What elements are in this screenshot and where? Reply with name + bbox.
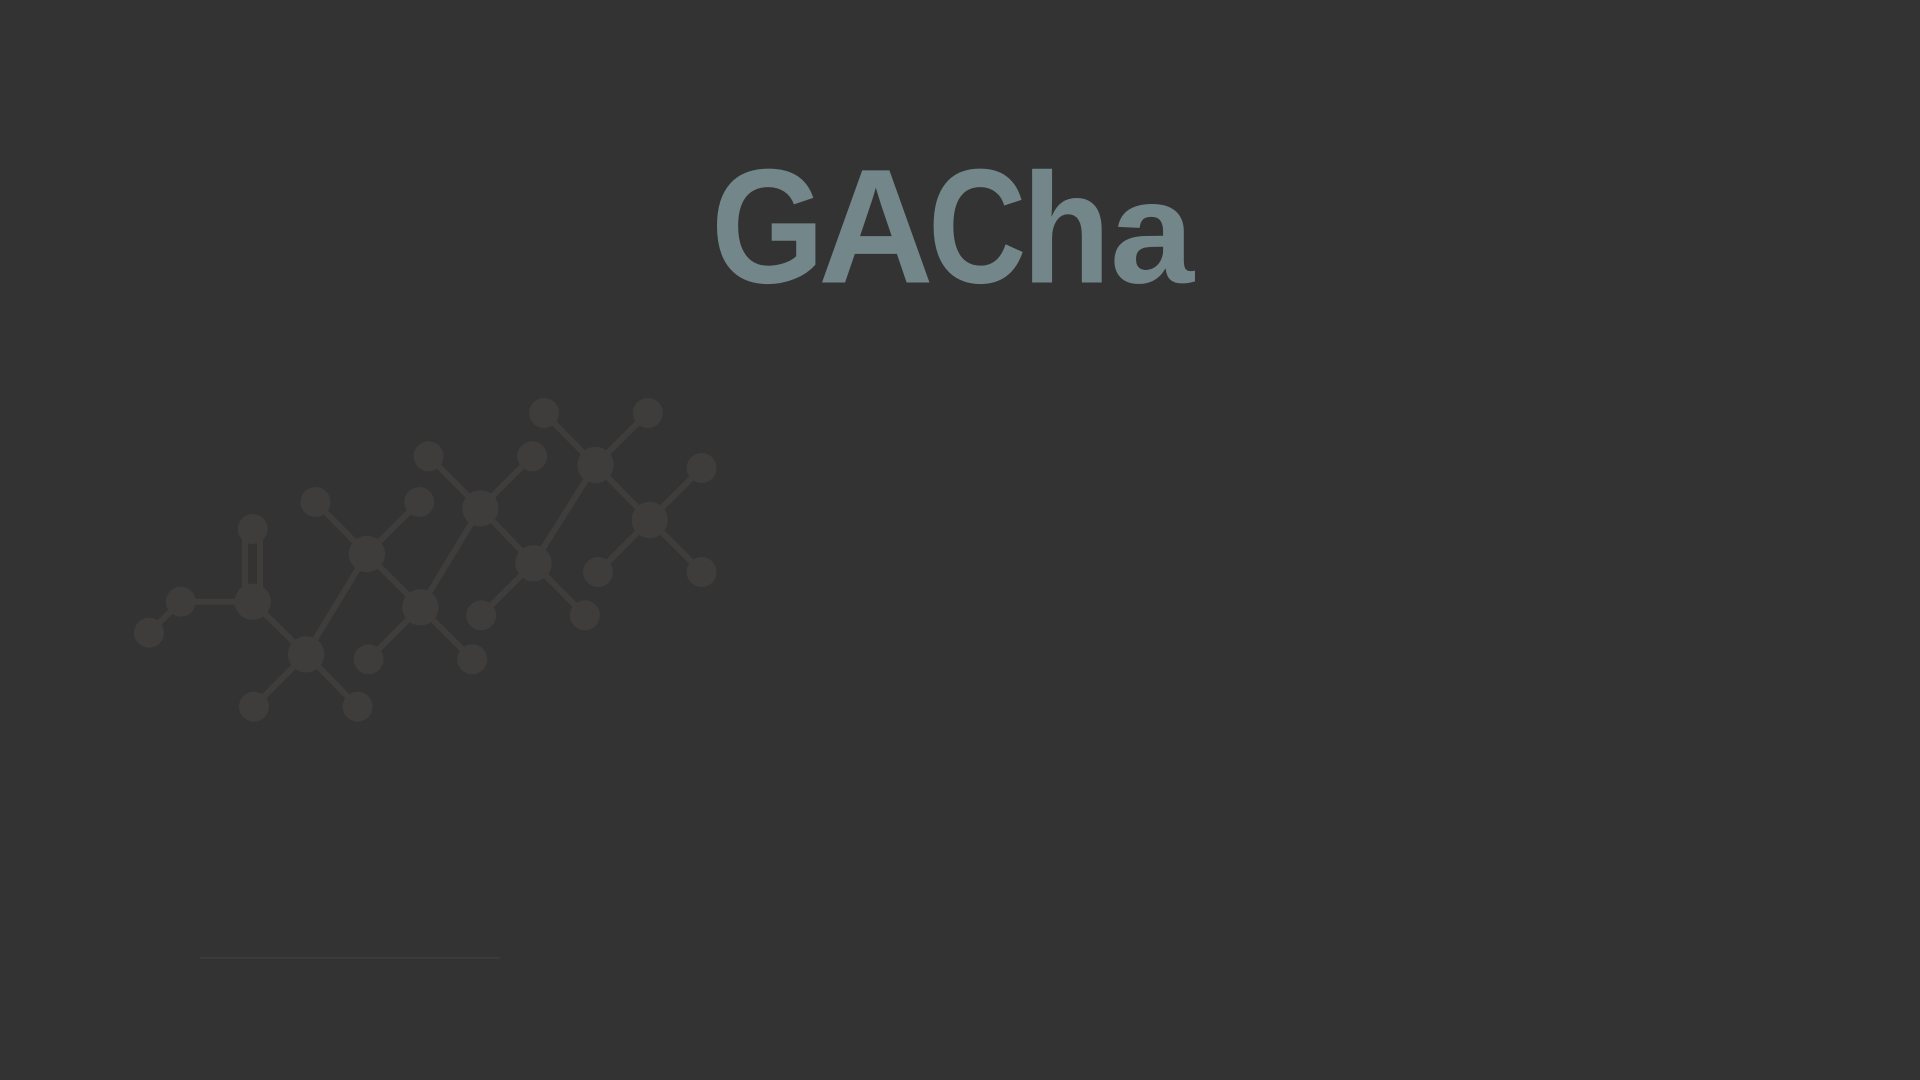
title: h <box>1022 142 1111 316</box>
title: A <box>818 134 934 318</box>
title: C <box>928 134 1026 318</box>
title <box>711 134 1196 318</box>
icon: molecule <box>134 398 717 722</box>
title: G <box>711 134 824 318</box>
title: a <box>1110 150 1196 314</box>
